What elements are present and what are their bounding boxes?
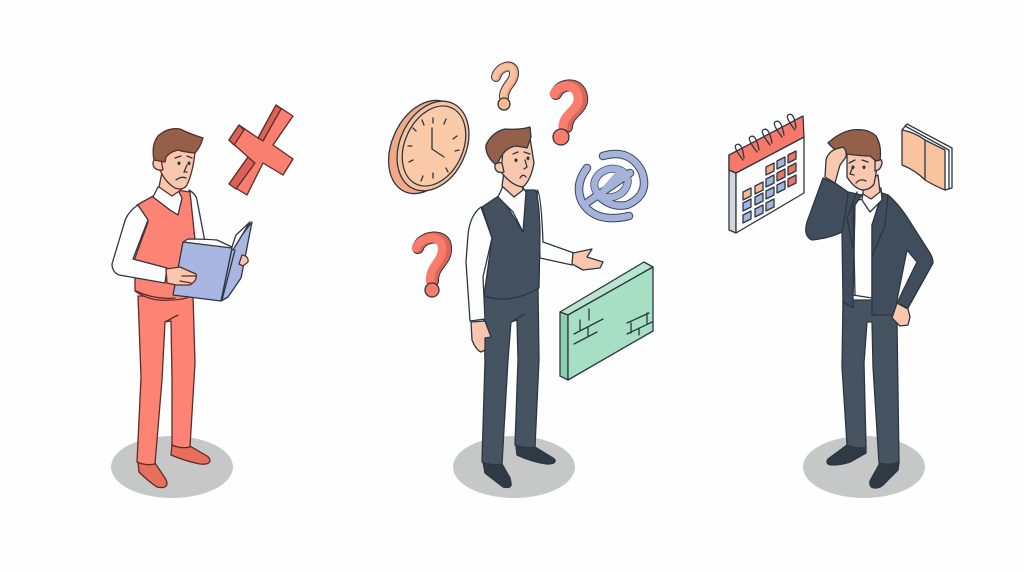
hand bbox=[166, 267, 196, 285]
hair bbox=[828, 130, 880, 161]
face bbox=[160, 138, 195, 189]
front face bbox=[568, 267, 653, 380]
hand bbox=[471, 321, 491, 352]
at outline bbox=[579, 154, 644, 218]
calendar cells bbox=[743, 151, 796, 223]
finger lines bbox=[180, 276, 196, 283]
shirt collar bbox=[498, 186, 526, 232]
jacket bbox=[806, 178, 933, 315]
clock ticks bbox=[408, 118, 459, 181]
hand pointing bbox=[572, 249, 603, 270]
at body bbox=[579, 154, 644, 218]
row 1 red bbox=[788, 151, 796, 163]
front cover bbox=[173, 242, 232, 301]
mark dot bbox=[425, 283, 439, 297]
neck bbox=[502, 172, 523, 197]
top face bbox=[560, 262, 653, 315]
sleeve bbox=[112, 205, 167, 283]
ear bbox=[875, 159, 882, 171]
clock rim bbox=[383, 89, 483, 203]
back sleeve bbox=[189, 190, 205, 242]
shoes bbox=[483, 446, 555, 488]
right body bbox=[872, 193, 933, 315]
icon: peach book bbox=[902, 124, 952, 190]
hair bbox=[486, 127, 531, 164]
figure: stressed man in suit bbox=[803, 130, 933, 498]
calendar page bbox=[736, 137, 804, 233]
row 1 bbox=[766, 163, 774, 175]
mark shade bbox=[496, 67, 514, 97]
icon: calendar bbox=[729, 114, 804, 233]
mark dot bbox=[498, 98, 510, 110]
mark shade bbox=[418, 237, 446, 281]
pages bbox=[183, 222, 250, 250]
face bbox=[847, 145, 878, 190]
row 2 red bbox=[777, 163, 796, 181]
head bbox=[486, 127, 534, 197]
book pages bbox=[902, 124, 952, 190]
figure: man with questions bbox=[453, 127, 603, 498]
cross body bbox=[229, 105, 293, 195]
head bbox=[153, 129, 203, 189]
sleeve bbox=[466, 207, 492, 321]
ground shadow bbox=[453, 436, 575, 498]
inner ring outline bbox=[590, 164, 632, 202]
facial features bbox=[513, 152, 530, 178]
ear bbox=[495, 163, 504, 172]
cross side shading bbox=[229, 105, 281, 189]
mark shade bbox=[556, 85, 582, 127]
shirt bbox=[853, 198, 882, 298]
back cover bbox=[221, 222, 252, 301]
mark depth bbox=[418, 237, 446, 281]
head bbox=[828, 130, 882, 199]
row 4 bbox=[743, 199, 774, 223]
icon: at symbol bbox=[579, 154, 644, 218]
mark depth bbox=[556, 85, 582, 127]
right arm bbox=[537, 190, 574, 265]
icon: peach question mark bbox=[495, 67, 514, 110]
lapels bbox=[847, 192, 888, 295]
ear bbox=[153, 159, 163, 170]
mark front bbox=[554, 86, 578, 127]
eyes bbox=[178, 162, 190, 164]
figure: man reading book bbox=[111, 129, 252, 498]
neck bbox=[159, 172, 181, 196]
panel: green brick wall bbox=[560, 262, 653, 380]
row 3 bbox=[743, 181, 785, 211]
mark outline bbox=[496, 67, 514, 97]
side face bbox=[560, 312, 568, 380]
row 2 bbox=[743, 182, 763, 200]
fist bbox=[892, 303, 910, 326]
vest bbox=[135, 190, 195, 300]
ground shadow bbox=[803, 436, 925, 498]
clock face bbox=[390, 96, 478, 196]
facial features bbox=[849, 160, 868, 183]
raised hand bbox=[825, 147, 846, 183]
book covers bbox=[902, 130, 945, 190]
ground shadow bbox=[111, 436, 233, 498]
crotch crease bbox=[165, 315, 178, 322]
trousers bbox=[842, 300, 899, 464]
inner ring bbox=[590, 164, 632, 202]
brick lines bbox=[574, 309, 652, 344]
clock hands bbox=[432, 128, 444, 157]
calendar header side bbox=[729, 155, 736, 173]
calendar side bbox=[729, 170, 736, 233]
clock back bbox=[374, 89, 476, 205]
spine line bbox=[222, 250, 235, 300]
book bbox=[173, 222, 252, 301]
crease bbox=[511, 314, 524, 322]
mark dot bbox=[553, 129, 569, 145]
icon: lower red question mark bbox=[416, 237, 446, 297]
row 3 red bbox=[788, 175, 796, 187]
vest hem bbox=[136, 291, 175, 298]
icon: wall clock bbox=[374, 89, 483, 205]
shoe back bbox=[171, 444, 210, 464]
raised arm bbox=[806, 178, 848, 240]
face bbox=[501, 138, 534, 187]
mark front bbox=[416, 238, 442, 281]
trousers bbox=[482, 288, 539, 465]
left body bbox=[835, 192, 862, 308]
brows and mouth bbox=[175, 156, 192, 180]
shoe front bbox=[138, 462, 167, 488]
shoes bbox=[827, 445, 899, 488]
collar bbox=[862, 188, 882, 212]
neck bbox=[863, 175, 880, 199]
icon: red question mark bbox=[553, 85, 582, 145]
page lines bbox=[905, 126, 949, 189]
calendar header bbox=[729, 116, 804, 173]
fingers bbox=[239, 255, 248, 266]
row 1 blue bbox=[777, 157, 785, 169]
hair bbox=[153, 129, 203, 162]
row 2 blue bbox=[766, 175, 774, 187]
eyes bbox=[515, 157, 529, 162]
legs bbox=[137, 296, 210, 488]
eyes bbox=[852, 166, 865, 168]
trousers bbox=[137, 296, 195, 465]
binder rings bbox=[735, 114, 796, 160]
icon: red cross bbox=[229, 105, 293, 195]
collar bbox=[153, 187, 182, 215]
mark body bbox=[495, 67, 513, 97]
vest bbox=[482, 190, 540, 299]
